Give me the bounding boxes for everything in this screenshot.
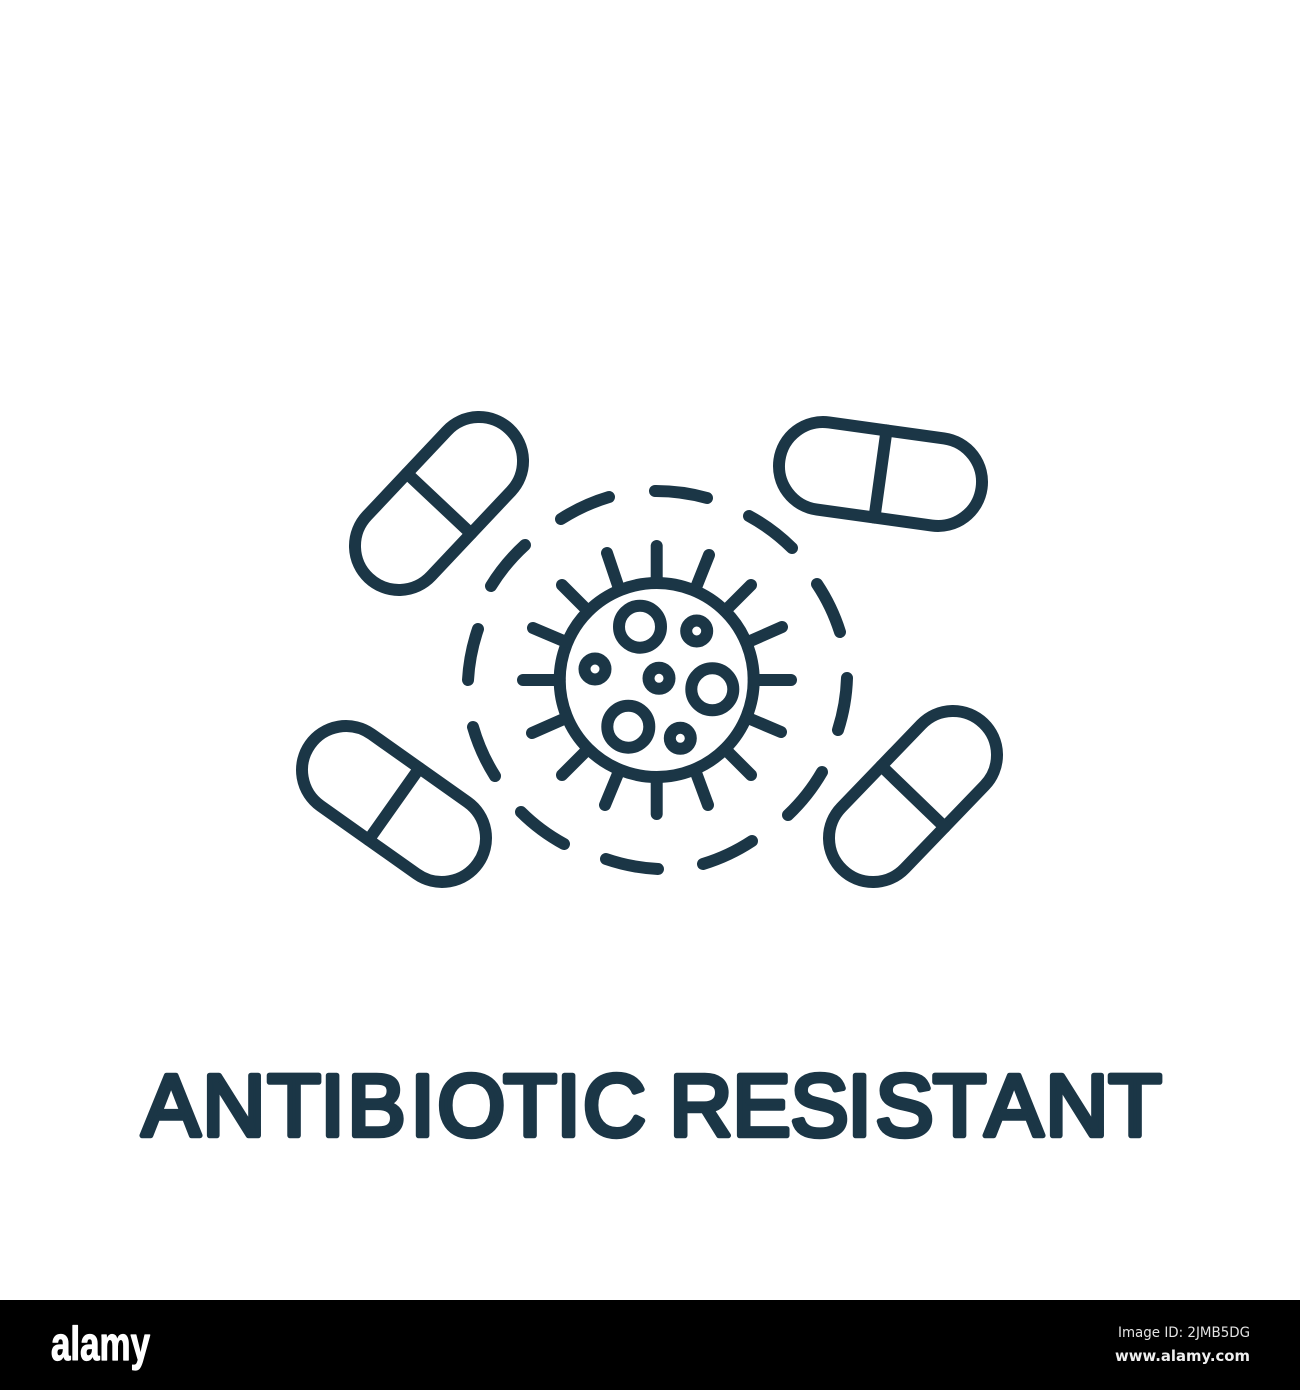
icon: bacterium [523, 546, 791, 814]
icon: capsule bottom left [285, 709, 503, 899]
icon: dashed protective ring [468, 491, 847, 869]
icon: capsule top left [337, 399, 541, 608]
icon: capsule top right [773, 416, 988, 532]
website: www.alamy.com [1115, 1347, 1250, 1365]
image id: Image ID: 2JMB5DG [1118, 1325, 1250, 1341]
footer bar [0, 1300, 1300, 1390]
title: antibiotic resistant: ANTIBIOTIC RESISTANT [142, 1058, 1162, 1154]
logo: alamy: alamy [51, 1317, 150, 1370]
icon: capsule bottom right [811, 693, 1015, 900]
icon: antibiotic resistant [285, 399, 1015, 900]
